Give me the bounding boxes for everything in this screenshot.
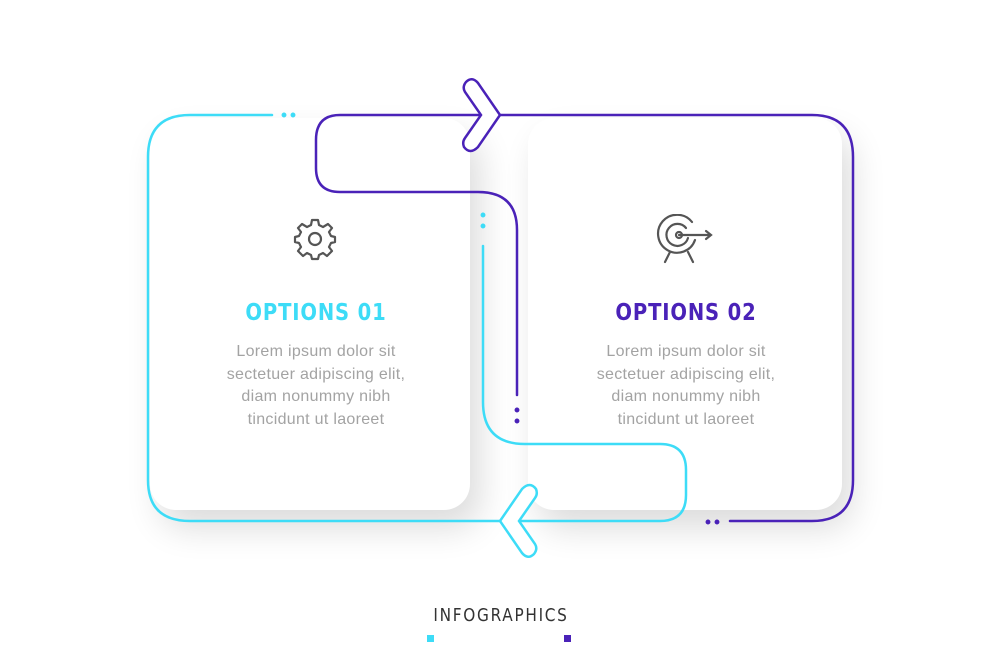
text block: options 01: diam nonummy nibh [241,388,391,405]
text block: options 02: sectetuer adipiscing elit, [597,366,775,382]
heading: options 02: OPTIONS 02 [615,300,757,326]
text block: options 01: tincidunt ut laoreet [248,410,384,428]
marker: cyan square [427,635,434,642]
text block: options 02 [597,343,775,428]
arrow: right chevron [463,79,500,151]
heading: options 01: OPTIONS 01 [245,300,387,326]
arrow: left chevron [500,485,537,557]
text block: options 01 [227,343,405,428]
marker: purple square [564,635,571,642]
text block: options 01: sectetuer adipiscing elit, [227,366,405,382]
text block: options 02: diam nonummy nibh [611,388,761,405]
icon: target [656,214,713,264]
panel: card 02 [528,118,842,510]
icon: gear [294,218,336,260]
panel: card 01 [150,118,470,510]
path: cyan loop [148,114,686,557]
path: purple loop [316,79,853,523]
text block: options 01: Lorem ipsum dolor sit [236,343,396,360]
text block: options 02: tincidunt ut laoreet [618,410,754,428]
text block: options 02: Lorem ipsum dolor sit [606,343,766,360]
title: infographics: INFOGRAPHICS [433,605,569,626]
